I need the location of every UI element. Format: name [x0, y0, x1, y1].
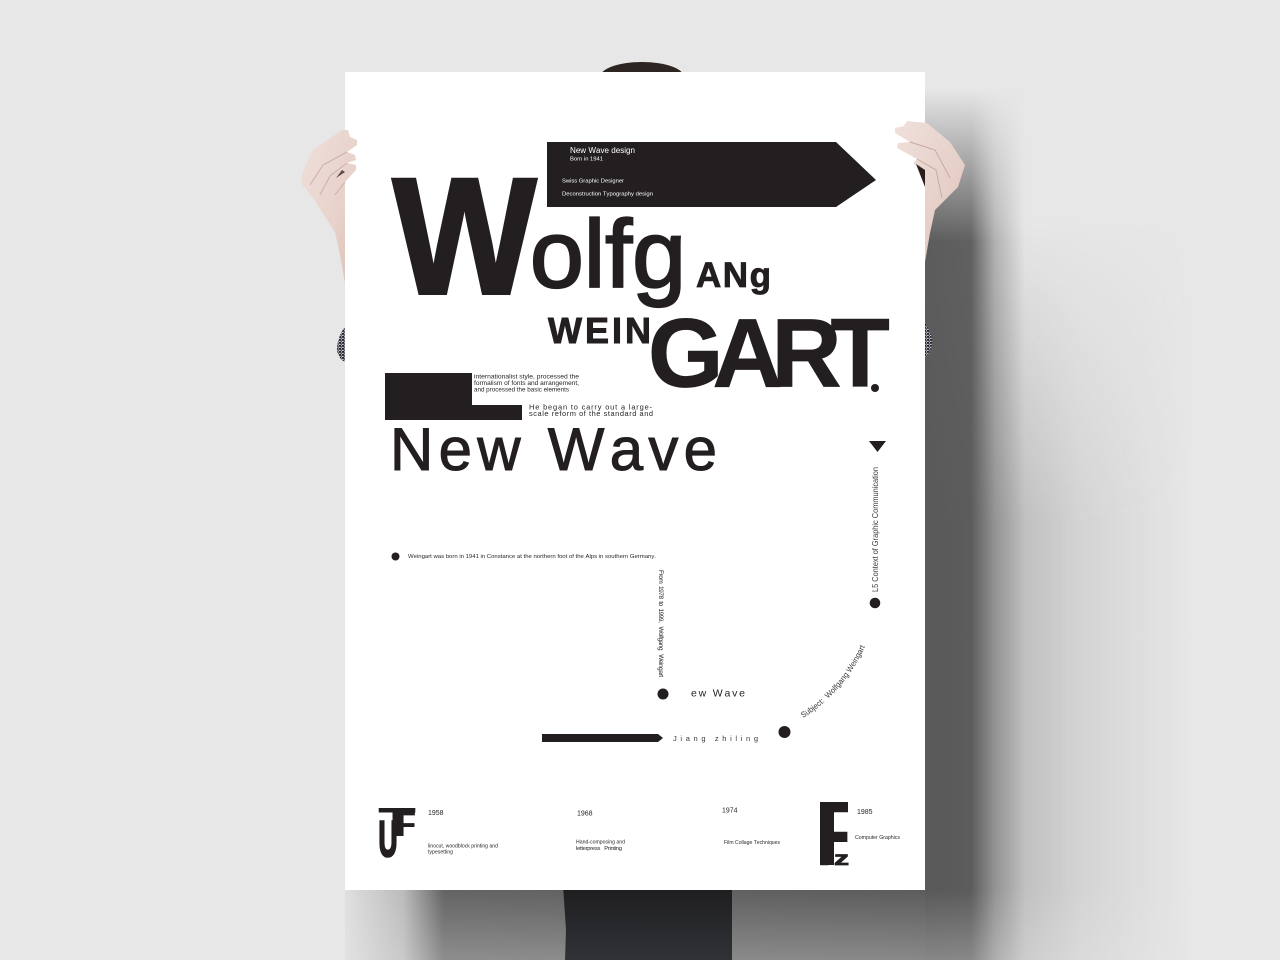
title: Weingart: WEIN	[548, 310, 651, 351]
title: Weingart: GART	[648, 298, 890, 408]
heading: New Wave: New Wave	[390, 416, 717, 483]
arrow panel: biography tags: Born in 1941	[570, 156, 603, 162]
arrow panel: biography tags: Deconstruction Typography design	[562, 192, 653, 198]
dot: subject	[778, 726, 790, 738]
stepped black block	[385, 373, 522, 420]
timeline: 1985: Computer Graphics	[855, 835, 900, 841]
triangle marker	[869, 441, 886, 452]
timeline: 1968: 1968	[577, 810, 593, 818]
arrow panel: biography tags: New Wave design	[570, 145, 635, 155]
text block: internationalist style: formalism of fonts and arrangement,	[474, 380, 579, 387]
timeline: 1974: 1974	[722, 808, 738, 814]
timeline: 1958: 1958	[428, 810, 444, 817]
title: Wolfgang: olfg	[530, 201, 686, 308]
icon: right hand	[895, 121, 965, 262]
text block: internationalist style: and processed the basic elements	[474, 386, 570, 394]
timeline: 1958: typesetting	[428, 850, 453, 856]
text block: reform: He began to carry out a large-	[529, 402, 653, 412]
timeline: 1985: 1985	[857, 809, 873, 816]
text block: reform	[529, 402, 653, 418]
label: author: Jiang zhiling	[673, 734, 758, 743]
text block: internationalist style: internationalist style, processed the	[474, 374, 579, 380]
timeline: 1958	[428, 810, 498, 856]
bullet: birth note: Weingart was born in 1941 in Constance at the northern foot of the Alps in southern Germany.	[408, 554, 656, 560]
title: Wolfgang: ANg	[696, 256, 771, 295]
vertical label: years: From 1978 to 1999, Wolfgang Weingart	[657, 570, 664, 677]
icon: F z monogram: F	[817, 783, 850, 885]
icon: UTF monogram: F	[397, 805, 416, 844]
icon: F z monogram	[817, 783, 850, 885]
figure: left sleeve	[337, 326, 346, 362]
figure: head	[600, 62, 684, 92]
timeline: 1974: Film Collage Techniques	[724, 840, 780, 846]
figure: right sleeve	[924, 322, 932, 358]
arrow panel: biography tags	[547, 142, 876, 207]
icon: UTF monogram: U	[378, 811, 398, 867]
arrow panel: biography tags: Swiss Graphic Designer	[562, 178, 624, 184]
curved label: subject: Subject: Wolfgang Weingart	[801, 645, 865, 718]
icon: left hand	[301, 130, 357, 283]
bullet: birth note	[392, 552, 656, 560]
text block: internationalist style	[474, 374, 579, 394]
small arrow bar	[542, 734, 663, 742]
timeline: 1974	[722, 808, 780, 846]
dot: course	[870, 598, 880, 608]
figure: legs	[563, 885, 732, 960]
timeline: 1968	[576, 810, 625, 852]
timeline: 1985	[855, 809, 900, 841]
vertical label: course: L5 Context of Graphic Communication	[871, 467, 880, 592]
title: Wolfgang	[392, 144, 771, 330]
label: ew Wave: ew Wave	[691, 688, 745, 700]
title: Weingart	[548, 298, 890, 408]
text block: reform: scale reform of the standard and	[529, 409, 653, 418]
timeline: 1968: letterpress Printing	[576, 846, 622, 852]
timeline: 1958: linocut, woodblock printing and	[428, 844, 498, 850]
timeline: 1968: Hand-composing and	[576, 840, 625, 846]
title: Wolfgang: W	[392, 144, 537, 330]
icon: UTF monogram: T	[378, 799, 416, 845]
icon: F z monogram: z	[834, 849, 849, 870]
dot: new wave	[658, 688, 668, 700]
poster shadow	[346, 98, 1148, 960]
poster sheet	[345, 72, 925, 890]
